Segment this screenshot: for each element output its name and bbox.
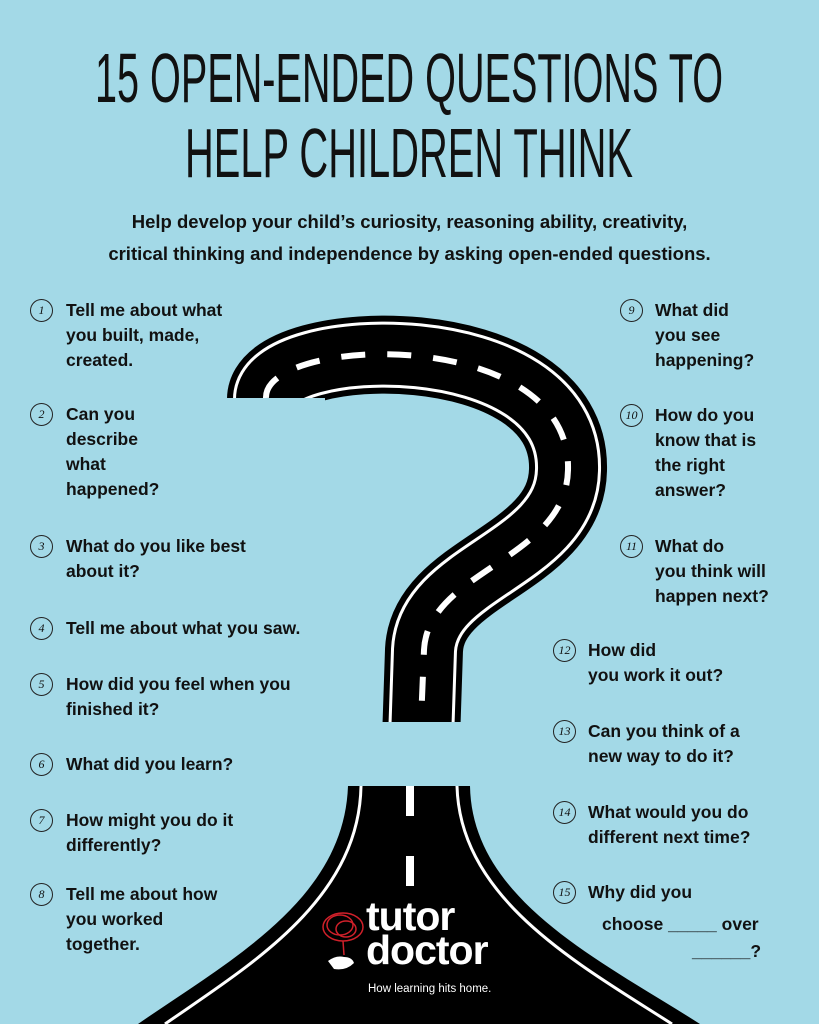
left questions <box>30 299 300 954</box>
right questions: 9 <box>628 303 634 317</box>
logo <box>322 893 491 995</box>
right questions: 11 <box>626 539 637 553</box>
subtitle: critical thinking and independence by asking open-ended questions. <box>108 243 711 264</box>
left questions: Tell me about what <box>66 300 222 320</box>
title <box>95 39 723 190</box>
q6 <box>30 753 233 776</box>
left questions: Tell me about how <box>66 884 217 904</box>
right questions: 10 <box>626 408 638 422</box>
left questions: 4 <box>38 621 44 635</box>
right questions <box>553 299 769 961</box>
q1 <box>30 299 222 370</box>
q10 <box>620 404 756 500</box>
left questions: about it? <box>66 561 140 581</box>
right questions: 14 <box>558 805 570 819</box>
right questions: you see <box>655 325 720 345</box>
right questions: Why did you <box>588 882 692 902</box>
right questions: What would you do <box>588 802 748 822</box>
left questions: finished it? <box>66 699 159 719</box>
left questions: 3 <box>38 539 44 553</box>
left questions: happened? <box>66 479 159 499</box>
left questions: together. <box>66 934 140 954</box>
right questions: How do you <box>655 405 754 425</box>
left questions: How did you feel when you <box>66 674 291 694</box>
q8 <box>30 883 218 954</box>
right questions: 13 <box>558 724 570 738</box>
left questions: 8 <box>38 887 44 901</box>
left questions: What do you like best <box>66 536 246 556</box>
subtitle <box>108 211 711 264</box>
left questions: 5 <box>38 677 44 691</box>
right questions: Can you think of a <box>588 721 740 741</box>
subtitle: Help develop your child’s curiosity, reasoning ability, creativity, <box>132 211 687 232</box>
left questions: Can you <box>66 404 135 424</box>
right questions: 12 <box>558 643 570 657</box>
left questions: 2 <box>38 407 44 421</box>
left questions: 6 <box>38 757 44 771</box>
q14 <box>553 801 750 847</box>
right questions: choose _____ over <box>602 914 759 934</box>
q3 <box>30 535 246 581</box>
right questions: 15 <box>558 885 570 899</box>
left questions: what <box>66 454 106 474</box>
q13 <box>553 720 740 766</box>
left questions: 1 <box>38 303 44 317</box>
q2 <box>30 403 159 499</box>
right questions: How did <box>588 640 656 660</box>
right questions: different next time? <box>588 827 750 847</box>
right questions: happening? <box>655 350 754 370</box>
right questions: you work it out? <box>588 665 723 685</box>
brand name <box>366 893 488 973</box>
left questions: How might you do it <box>66 810 233 830</box>
right questions: you think will <box>655 561 766 581</box>
right questions: new way to do it? <box>588 746 734 766</box>
brand name: tutor <box>366 893 454 939</box>
left questions: What did you learn? <box>66 754 233 774</box>
q15 <box>553 881 761 961</box>
left questions: you built, made, <box>66 325 199 345</box>
q11 <box>620 535 769 606</box>
left questions: 7 <box>38 813 44 827</box>
right questions: know that is <box>655 430 756 450</box>
right questions: the right <box>655 455 725 475</box>
left questions: you worked <box>66 909 163 929</box>
right questions: What do <box>655 536 724 556</box>
q9 <box>620 299 754 370</box>
left questions: created. <box>66 350 133 370</box>
right questions: answer? <box>655 480 726 500</box>
brand name: doctor <box>366 927 488 973</box>
right questions: ______? <box>692 941 761 961</box>
left questions: describe <box>66 429 138 449</box>
q12 <box>553 639 723 685</box>
left questions: differently? <box>66 835 161 855</box>
q5 <box>30 673 291 719</box>
right questions: happen next? <box>655 586 769 606</box>
icon: red scribble brain and hand <box>322 912 364 970</box>
tagline: How learning hits home. <box>368 983 491 995</box>
right questions: What did <box>655 300 729 320</box>
q4 <box>30 617 300 640</box>
left questions: Tell me about what you saw. <box>66 618 300 638</box>
q7 <box>30 809 233 855</box>
